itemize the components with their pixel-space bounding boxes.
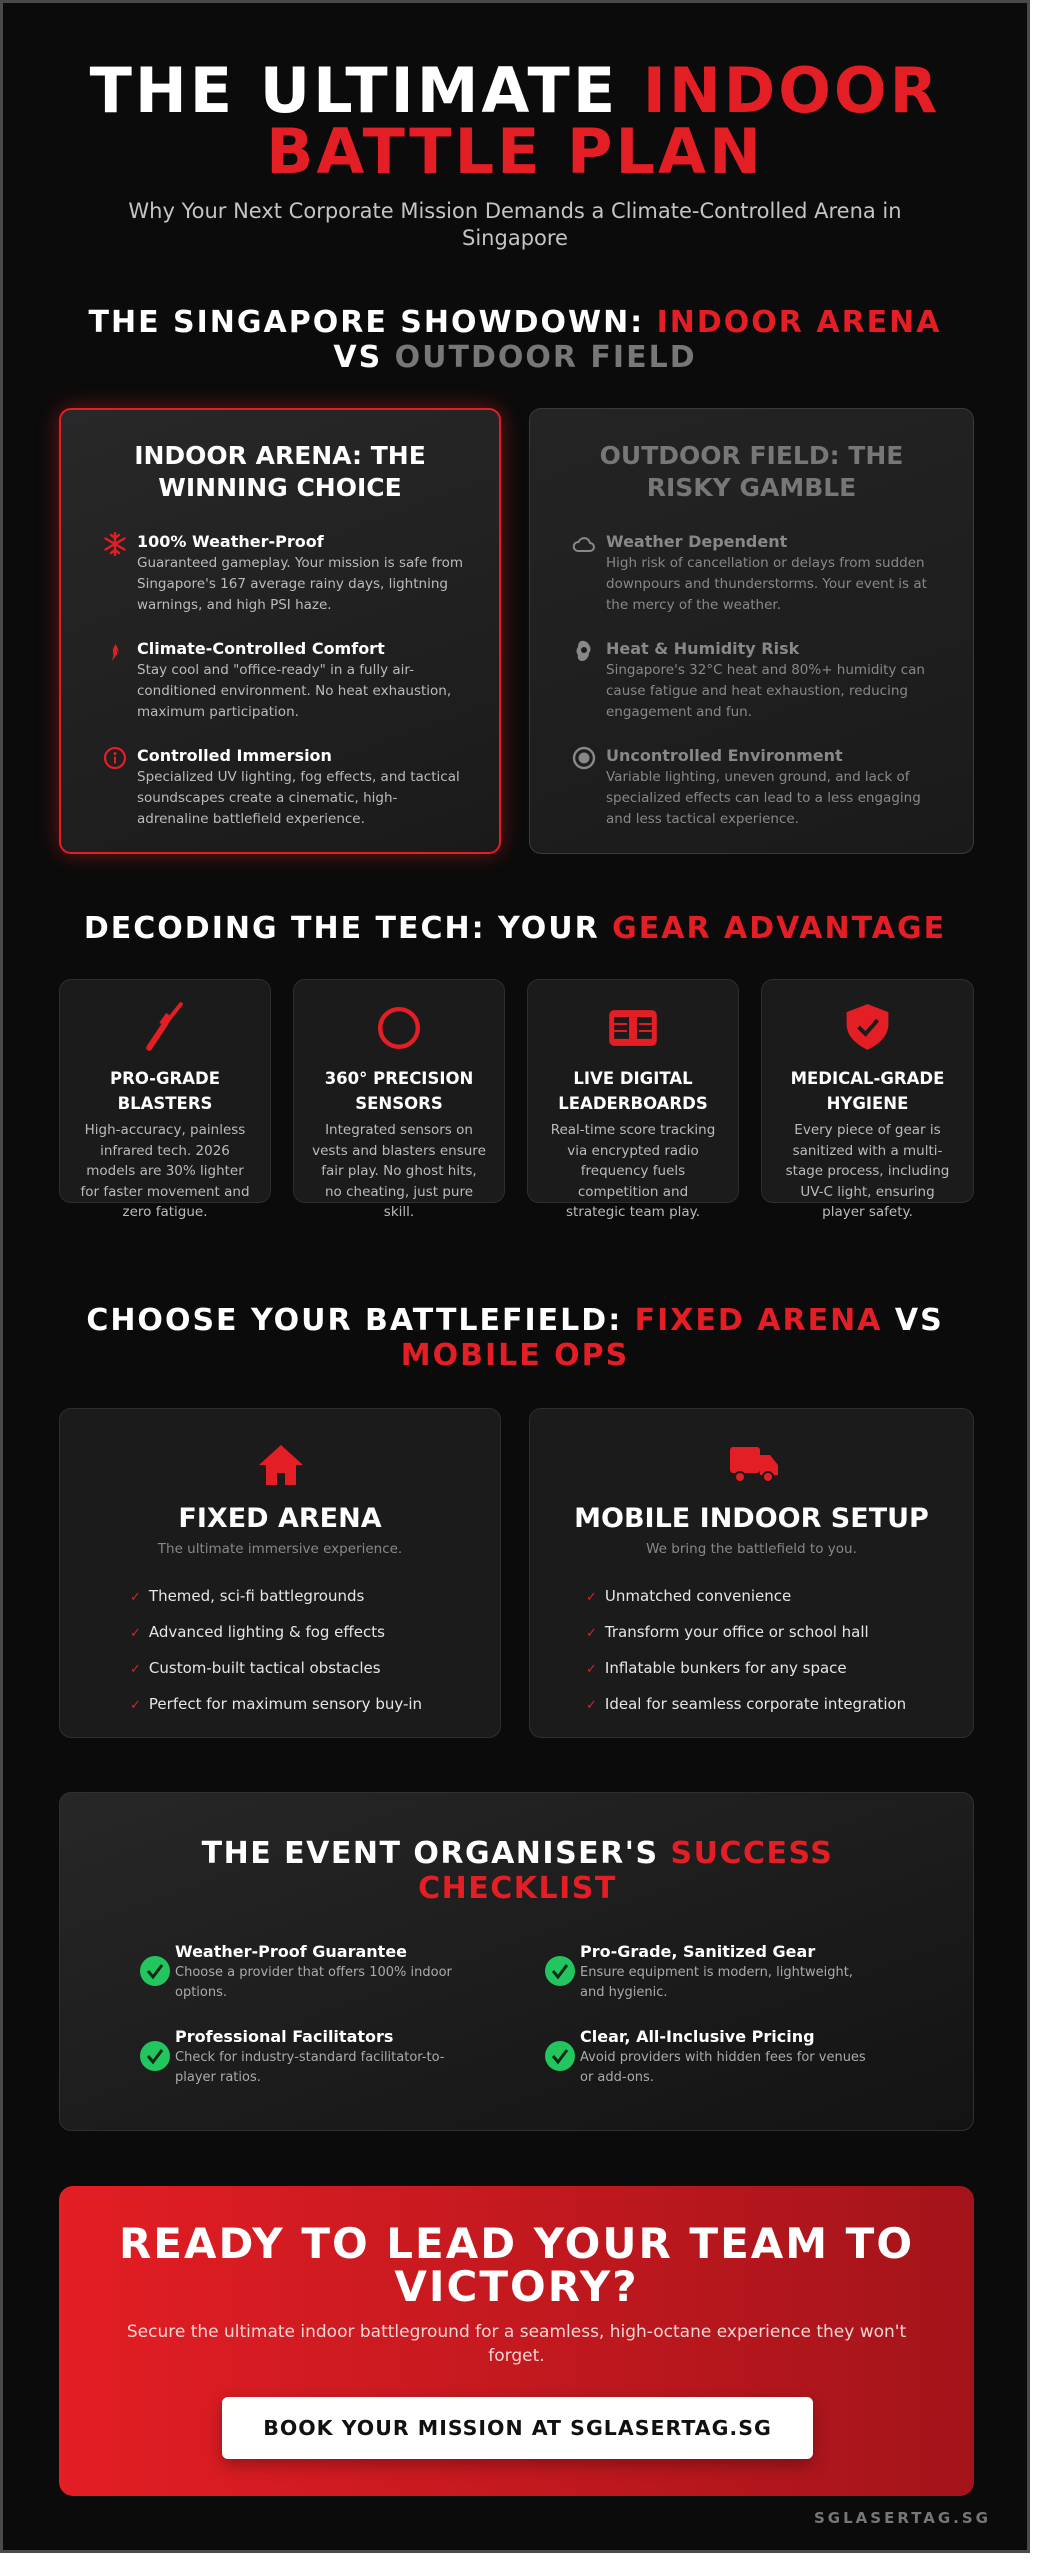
item: uncontrolled environment <box>572 746 921 827</box>
panel: checklist: or add-ons. <box>580 2070 654 2085</box>
heading: showdown: THE SINGAPORE SHOWDOWN: INDOOR ARENA <box>89 305 941 340</box>
panel: outdoor field: Uncontrolled Environment <box>606 746 843 765</box>
panel: indoor arena: adrenaline battlefield experience. <box>137 811 365 827</box>
item: heat humidity <box>576 639 925 720</box>
panel: indoor arena: Stay cool and "office-ready" in a fully air-conditioned environment. No heat exhaustion, maximum participation. <box>137 662 451 720</box>
panel: indoor arena: Guaranteed gameplay. Your mission is safe from Singapore's 167 average rainy days, lightning warnings, and high PSI haze. <box>137 555 463 613</box>
indoor title: INDOOR ARENA: THE <box>134 441 426 470</box>
list: fixed features: ✓ Advanced lighting & fog effects <box>130 1623 385 1641</box>
heading: battlefield: MOBILE OPS <box>401 1338 629 1373</box>
list: mobile features <box>586 1587 906 1713</box>
card: leaderboards <box>527 979 739 1203</box>
panel: indoor arena: Climate-Controlled Comfort <box>137 639 385 658</box>
panel: checklist: options. <box>175 1985 227 2000</box>
icon: board <box>609 1010 657 1046</box>
list: mobile features: ✓ Inflatable bunkers for any space <box>586 1659 847 1677</box>
button <box>222 2397 813 2459</box>
list: fixed features: ✓ Custom-built tactical obstacles <box>130 1659 381 1677</box>
title <box>90 54 940 188</box>
button: BOOK YOUR MISSION AT SGLASERTAG.SG <box>263 2416 772 2440</box>
card: hygiene: Every piece of gear is sanitized with a multi-stage process, including UV-C light, ensuring player safety. <box>786 1122 949 1220</box>
panel: outdoor field: Singapore's 32°C heat and 80%+ humidity can cause fatigue and heat exhaustion, reducing engagement and fun. <box>606 662 925 720</box>
cta title: VICTORY? <box>394 2262 639 2311</box>
icon: flame <box>112 642 118 661</box>
check item 1 <box>140 1942 452 2000</box>
card: blasters <box>59 979 271 1203</box>
panel: indoor arena: Specialized UV lighting, fog effects, and tactical soundscapes create a cinematic, high- <box>137 769 460 806</box>
panel: checklist: and hygienic. <box>580 1985 668 2000</box>
card: blasters: PRO-GRADE <box>110 1069 220 1088</box>
list: mobile features: ✓ Unmatched convenience <box>586 1587 791 1605</box>
card: leaderboards: LIVE DIGITAL <box>573 1069 693 1088</box>
heading: showdown <box>88 305 941 375</box>
card: leaderboards: LEADERBOARDS <box>558 1094 708 1113</box>
panel: mobile setup: We bring the battlefield to you. <box>646 1541 857 1557</box>
panel: outdoor field: High risk of cancellation or delays from sudden downpours and thunderstorms. Your event is at <box>606 555 927 592</box>
icon: cloud <box>572 537 595 552</box>
panel: outdoor field: Weather Dependent <box>606 532 787 551</box>
card: sensors: Integrated sensors on vests and blasters ensure fair play. No ghost hits, no cheating, just pure skill. <box>312 1122 486 1220</box>
panel: mobile setup: MOBILE INDOOR SETUP <box>574 1503 929 1534</box>
panel: call to action <box>59 2186 974 2496</box>
panel: indoor arena <box>59 408 501 854</box>
panel: mobile setup <box>529 1408 974 1738</box>
heading: battlefield: CHOOSE YOUR BATTLEFIELD: FIXED ARENA VS <box>86 1303 944 1338</box>
list: mobile features: ✓ Transform your office or school hall <box>586 1623 869 1641</box>
outdoor title: OUTDOOR FIELD: THE <box>600 441 903 470</box>
check item 3 <box>140 2027 444 2085</box>
panel: fixed arena: FIXED ARENA <box>178 1503 382 1534</box>
panel: indoor arena: Controlled Immersion <box>137 746 332 765</box>
outdoor title <box>600 441 903 502</box>
item: climate controlled <box>112 639 451 720</box>
panel: checklist: Pro-Grade, Sanitized Gear <box>580 1942 815 1961</box>
list: fixed features: ✓ Perfect for maximum sensory buy-in <box>130 1695 422 1713</box>
card: blasters: High-accuracy, painless infrared tech. 2026 models are 30% lighter for faster movement and zero fatigue. <box>80 1122 250 1220</box>
card: hygiene: MEDICAL-GRADE <box>791 1069 944 1088</box>
panel: checklist <box>59 1792 974 2131</box>
card: sensors <box>293 979 505 1203</box>
panel: checklist: Check for industry-standard facilitator-to- <box>175 2050 444 2065</box>
icon: heat blob <box>576 640 590 661</box>
panel: outdoor field <box>529 408 974 854</box>
list: fixed features: ✓ Themed, sci-fi battlegrounds <box>130 1587 364 1605</box>
heading: battlefield <box>86 1303 944 1373</box>
panel: outdoor field: Variable lighting, uneven ground, and lack of specialized effects can lead to a less engaging and less tactical experience. <box>606 769 921 827</box>
icon: truck <box>730 1447 778 1481</box>
check item 4 <box>545 2027 866 2085</box>
card: leaderboards: Real-time score tracking via encrypted radio frequency fuels competition and strategic team play. <box>551 1122 715 1220</box>
panel: tech cards <box>59 979 974 1220</box>
checklist title: THE EVENT ORGANISER'S SUCCESS <box>202 1836 833 1871</box>
checklist title: CHECKLIST <box>418 1871 617 1906</box>
card: hygiene <box>761 979 974 1203</box>
icon: snowflake <box>104 532 126 556</box>
panel: indoor arena: 100% Weather-Proof <box>137 532 324 551</box>
icon: target circle <box>572 746 596 770</box>
icon: ring <box>378 1007 420 1049</box>
card: hygiene: HYGIENE <box>827 1094 908 1113</box>
outdoor title: RISKY GAMBLE <box>647 473 856 502</box>
icon: blaster <box>146 1002 183 1051</box>
heading: tech: DECODING THE TECH: YOUR GEAR ADVANTAGE <box>84 911 946 946</box>
panel: checklist: player ratios. <box>175 2070 261 2085</box>
item: weather-proof <box>104 532 463 613</box>
card: sensors: 360° PRECISION <box>325 1069 473 1088</box>
icon: info circle <box>104 746 126 770</box>
panel: fixed arena <box>59 1408 501 1738</box>
panel: checklist: Weather-Proof Guarantee <box>175 1942 407 1961</box>
cta title <box>119 2219 914 2311</box>
indoor title <box>134 441 426 502</box>
checklist title <box>202 1836 833 1906</box>
check item 2 <box>545 1942 853 2000</box>
heading: showdown: VS OUTDOOR FIELD <box>333 340 697 375</box>
title: BATTLE PLAN <box>266 115 764 188</box>
list: fixed features <box>130 1587 422 1713</box>
panel: checklist: Ensure equipment is modern, lightweight, <box>580 1965 853 1980</box>
item: weather dependent <box>572 532 927 613</box>
panel: checklist: Avoid providers with hidden fees for venues <box>580 2050 866 2065</box>
item: controlled immersion <box>104 746 460 827</box>
panel: outdoor field: the mercy of the weather. <box>606 597 781 613</box>
card: blasters: BLASTERS <box>118 1094 212 1113</box>
panel: outdoor field: Heat & Humidity Risk <box>606 639 799 658</box>
panel: checklist: Professional Facilitators <box>175 2027 393 2046</box>
panel: checklist: Choose a provider that offers 100% indoor <box>175 1965 452 1980</box>
cta title: READY TO LEAD YOUR TEAM TO <box>119 2219 914 2268</box>
panel: checklist: Clear, All-Inclusive Pricing <box>580 2027 815 2046</box>
icon: house <box>259 1445 303 1485</box>
title: THE ULTIMATE INDOOR <box>90 54 940 127</box>
indoor title: WINNING CHOICE <box>158 473 402 502</box>
subtitle: Why Your Next Corporate Mission Demands a Climate-Controlled Arena in Singapore <box>128 199 902 250</box>
icon: shield check <box>846 1004 888 1050</box>
panel: fixed arena: The ultimate immersive experience. <box>158 1541 402 1557</box>
footer: SGLASERTAG.SG <box>814 2509 991 2527</box>
card: sensors: SENSORS <box>355 1094 443 1113</box>
list: mobile features: ✓ Ideal for seamless corporate integration <box>586 1695 906 1713</box>
cta body: Secure the ultimate indoor battleground for a seamless, high-octane experience they won't forget. <box>127 2322 906 2366</box>
